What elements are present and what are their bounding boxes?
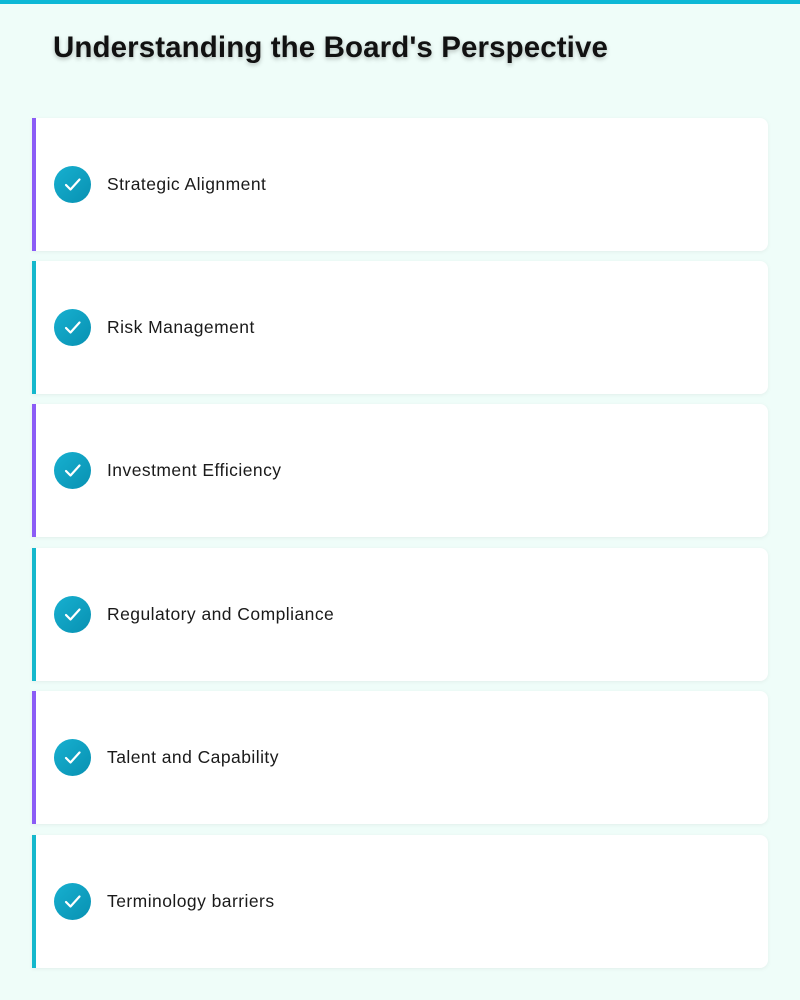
- icon: check: [54, 596, 91, 633]
- card: investment efficiency: [32, 404, 768, 537]
- card: terminology: Terminology barriers: [107, 891, 275, 911]
- card: risk management: Risk Management: [107, 317, 255, 337]
- title: Understanding the Board's Perspective: [53, 31, 608, 64]
- card: investment efficiency: Investment Efficiency: [107, 460, 281, 480]
- card: risk management: [32, 261, 768, 394]
- card: regulatory: [32, 548, 768, 681]
- icon: check: [54, 166, 91, 203]
- icon: check: [54, 739, 91, 776]
- icon: check: [54, 452, 91, 489]
- card: regulatory: Regulatory and Compliance: [107, 604, 334, 624]
- card: talent: [32, 691, 768, 824]
- card: terminology: [32, 835, 768, 968]
- card: strategic alignment: [32, 118, 768, 251]
- icon: check: [54, 883, 91, 920]
- card: talent: Talent and Capability: [107, 747, 279, 767]
- card: strategic alignment: Strategic Alignment: [107, 174, 266, 194]
- icon: check: [54, 309, 91, 346]
